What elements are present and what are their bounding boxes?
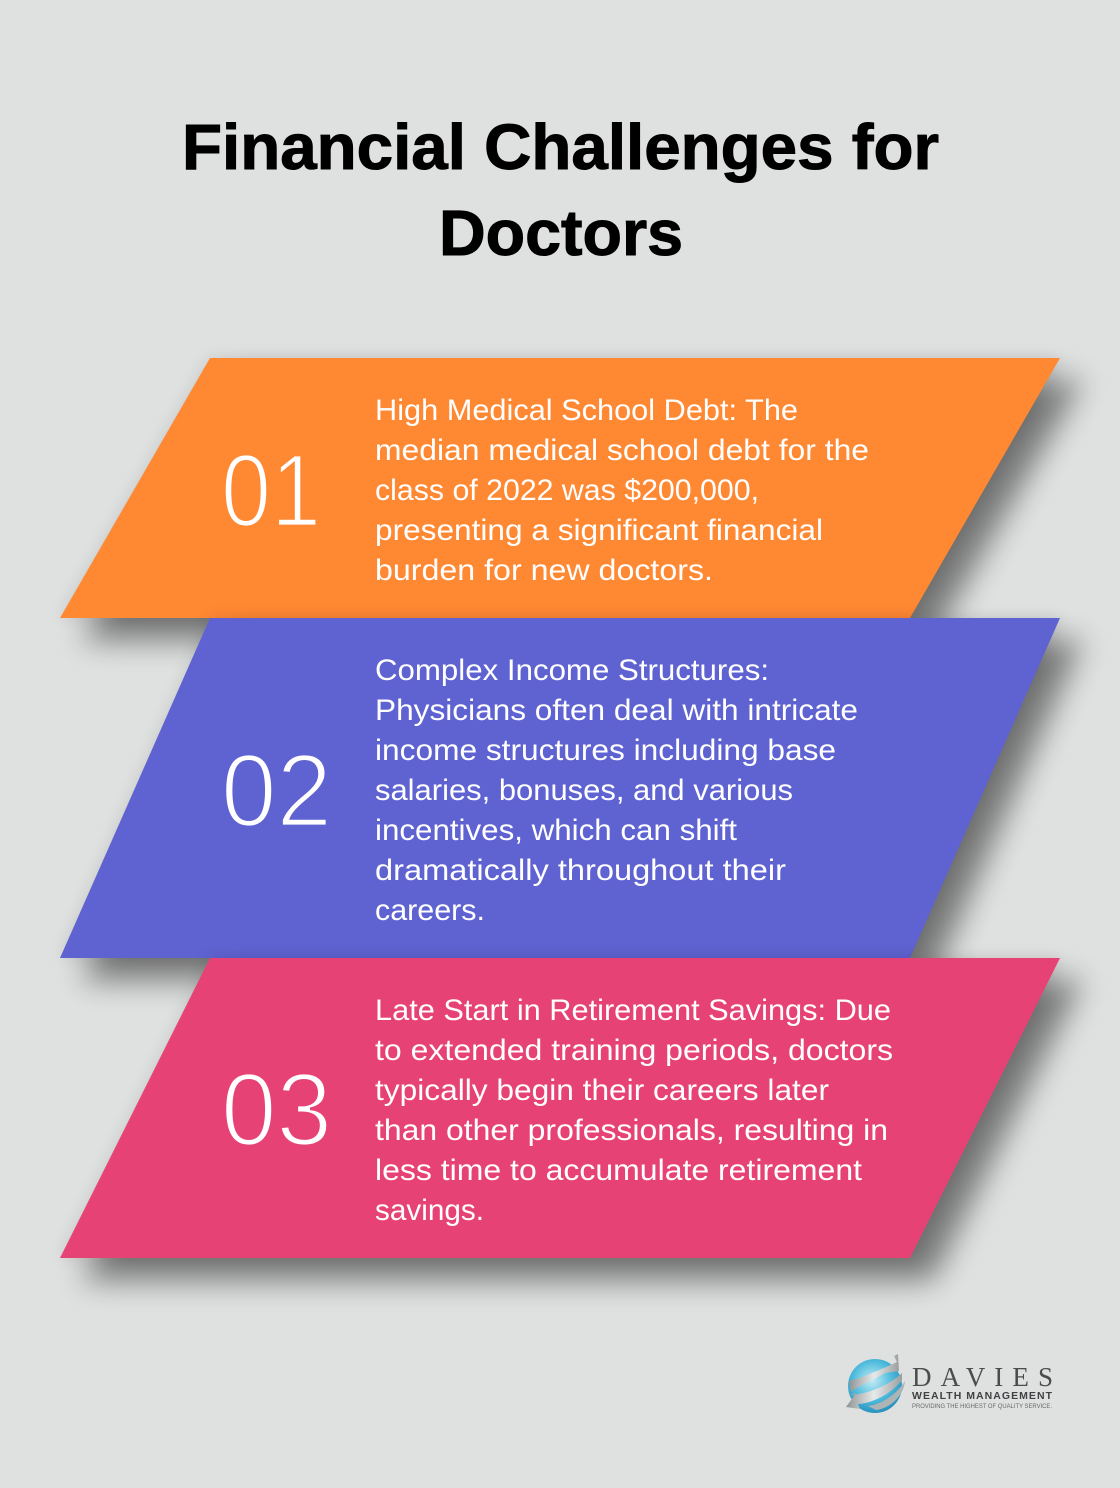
panel: complex income structures bbox=[60, 618, 1082, 980]
text: high medical school debt: median medical school debt for the bbox=[375, 434, 869, 467]
text: late start in retirement savings: less time to accumulate retirement bbox=[375, 1154, 862, 1187]
text: complex income structures: income structures including base bbox=[375, 734, 836, 767]
text: high medical school debt: class of 2022 was $200,000, bbox=[375, 474, 759, 507]
text: complex income structures: incentives, which can shift bbox=[375, 814, 737, 847]
text: high medical school debt: presenting a significant financial bbox=[375, 514, 823, 547]
text: late start in retirement savings: typically begin their careers later bbox=[375, 1074, 829, 1107]
text: complex income structures: Complex Income Structures: bbox=[375, 654, 769, 687]
text: high medical school debt bbox=[375, 394, 869, 587]
logo wordmark: DAVIES bbox=[912, 1362, 1053, 1392]
text: late start in retirement savings bbox=[375, 994, 893, 1227]
icon: globe with arrows bbox=[846, 1354, 905, 1413]
text: complex income structures: careers. bbox=[375, 894, 485, 927]
number 01: 01 bbox=[221, 433, 321, 548]
number 02: 02 bbox=[221, 733, 332, 848]
text: complex income structures: Physicians often deal with intricate bbox=[375, 694, 858, 727]
text: high medical school debt: High Medical School Debt: The bbox=[375, 394, 798, 427]
text: complex income structures: dramatically throughout their bbox=[375, 854, 786, 887]
title: Doctors bbox=[439, 197, 683, 269]
text: complex income structures bbox=[375, 654, 858, 927]
text: complex income structures: salaries, bonuses, and various bbox=[375, 774, 793, 807]
text: late start in retirement savings: than other professionals, resulting in bbox=[375, 1114, 888, 1147]
logo: Davies Wealth Management bbox=[846, 1354, 1053, 1413]
text: late start in retirement savings: savings. bbox=[375, 1194, 484, 1227]
text: high medical school debt: burden for new doctors. bbox=[375, 554, 713, 587]
number 03: 03 bbox=[221, 1052, 332, 1167]
text: late start in retirement savings: Late Start in Retirement Savings: Due bbox=[375, 994, 891, 1027]
logo subtitle: WEALTH MANAGEMENT bbox=[912, 1390, 1053, 1402]
title: Financial Challenges for bbox=[182, 111, 939, 183]
logo tagline: PROVIDING THE HIGHEST OF QUALITY SERVICE. bbox=[912, 1403, 1052, 1410]
text: late start in retirement savings: to extended training periods, doctors bbox=[375, 1034, 893, 1067]
panel: late start in retirement savings bbox=[60, 958, 1082, 1280]
panel: high medical school debt bbox=[60, 358, 1082, 640]
title bbox=[182, 111, 939, 269]
